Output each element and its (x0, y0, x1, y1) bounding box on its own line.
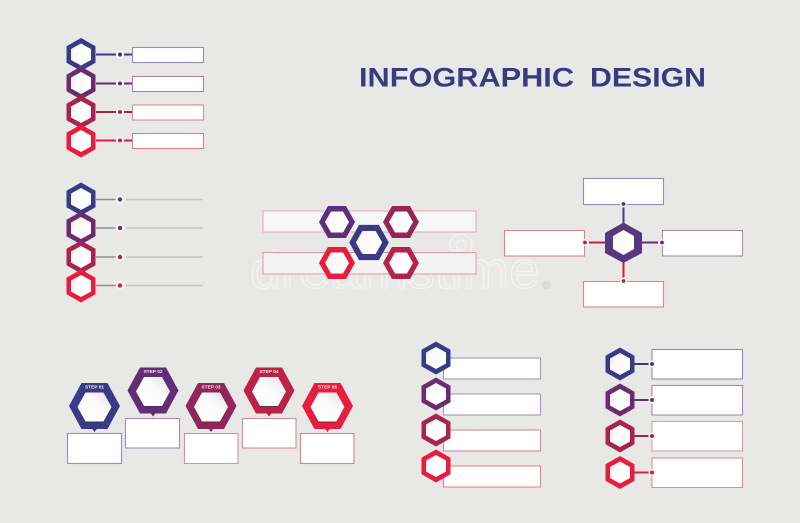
step 03 (184, 383, 238, 464)
box row 2 (444, 394, 540, 415)
icon: hexagon column (422, 342, 450, 482)
step 04: STEP 04 (259, 369, 279, 375)
panel: five steps (68, 368, 354, 464)
right box (662, 230, 742, 256)
icon: five hexagons (319, 206, 419, 279)
title: DESIGN (590, 62, 706, 92)
watermark: dreamstime (250, 242, 540, 300)
icon: hexagon column (66, 182, 96, 302)
step 01 (68, 383, 122, 464)
title (359, 62, 706, 92)
row 2 (606, 384, 742, 416)
icon: hexagon column (66, 38, 96, 158)
row 2 connector and box (96, 76, 204, 92)
panel: hexagon list with lines (66, 182, 203, 302)
row 1 connector and box (96, 48, 204, 62)
step 03: STEP 03 (201, 384, 221, 390)
row 3 connector and box (96, 105, 204, 120)
panel: cross diagram (504, 178, 742, 307)
step 05 (300, 383, 354, 464)
row 4 (606, 456, 742, 489)
panel: hexagons overlapping boxes (422, 342, 540, 487)
step 04 (242, 368, 296, 448)
lower bar (263, 252, 476, 274)
row 3 (606, 420, 742, 452)
step 05: STEP 05 (318, 384, 337, 390)
box row 4 (444, 466, 540, 487)
connectors (582, 200, 666, 284)
panel: hexagon list with boxes (66, 38, 204, 158)
box row 3 (444, 430, 540, 451)
panel: hexagon cluster (263, 206, 476, 279)
step 01: STEP 01 (85, 384, 104, 390)
box row 1 (444, 358, 540, 379)
icon: center hexagon (605, 222, 642, 263)
title: INFOGRAPHIC (359, 62, 574, 92)
row lines and dots (96, 195, 203, 290)
step 02 (126, 368, 180, 448)
bottom box (584, 282, 664, 307)
row 1 (606, 348, 742, 380)
row 4 connector and box (96, 134, 204, 148)
left box (504, 230, 584, 256)
panel: hexagons connected to boxes (606, 348, 742, 489)
top box (584, 178, 664, 204)
upper bar (263, 211, 476, 232)
step 02: STEP 02 (143, 369, 163, 375)
